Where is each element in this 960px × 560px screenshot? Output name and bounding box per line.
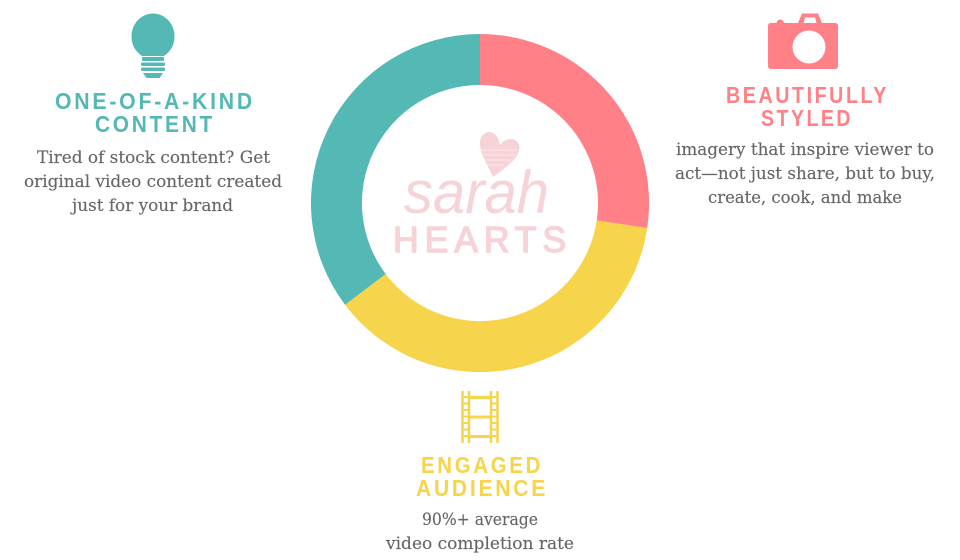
panel: beautifully styled bbox=[675, 14, 935, 208]
icon: film strip bbox=[462, 391, 498, 443]
body text: video completion rate bbox=[385, 534, 574, 554]
heading bbox=[726, 82, 889, 131]
body text bbox=[24, 148, 282, 216]
heading: AUDIENCE bbox=[416, 475, 548, 501]
body text: imagery that inspire viewer to bbox=[676, 140, 934, 160]
body text: create, cook, and make bbox=[708, 188, 902, 208]
logo wordmark: HEARTS bbox=[393, 219, 572, 260]
body text: just for your brand bbox=[70, 196, 233, 216]
donut chart bbox=[311, 34, 649, 372]
segment: teal bbox=[311, 34, 480, 305]
icon: striped heart bbox=[480, 132, 520, 177]
heading: STYLED bbox=[761, 105, 853, 131]
heading: ENGAGED bbox=[421, 452, 543, 478]
body text bbox=[385, 510, 574, 554]
panel: one-of-a-kind content bbox=[24, 14, 282, 216]
heading: CONTENT bbox=[95, 111, 215, 137]
icon: light bulb bbox=[132, 14, 174, 78]
icon: camera bbox=[768, 14, 838, 69]
body text bbox=[675, 140, 935, 208]
heading bbox=[416, 452, 548, 501]
body text: 90%+ average bbox=[422, 510, 538, 530]
body text: Tired of stock content? Get bbox=[37, 148, 270, 168]
segment: pink bbox=[480, 34, 649, 228]
body text: original video content created bbox=[24, 172, 282, 192]
segment: yellow bbox=[345, 220, 647, 372]
heading: BEAUTIFULLY bbox=[726, 82, 889, 108]
logo script: sarah bbox=[404, 159, 549, 226]
panel: engaged audience bbox=[385, 391, 574, 554]
heading bbox=[55, 88, 255, 137]
center logo bbox=[393, 132, 572, 260]
heading: ONE-OF-A-KIND bbox=[55, 88, 255, 114]
body text: act—not just share, but to buy, bbox=[675, 164, 935, 184]
